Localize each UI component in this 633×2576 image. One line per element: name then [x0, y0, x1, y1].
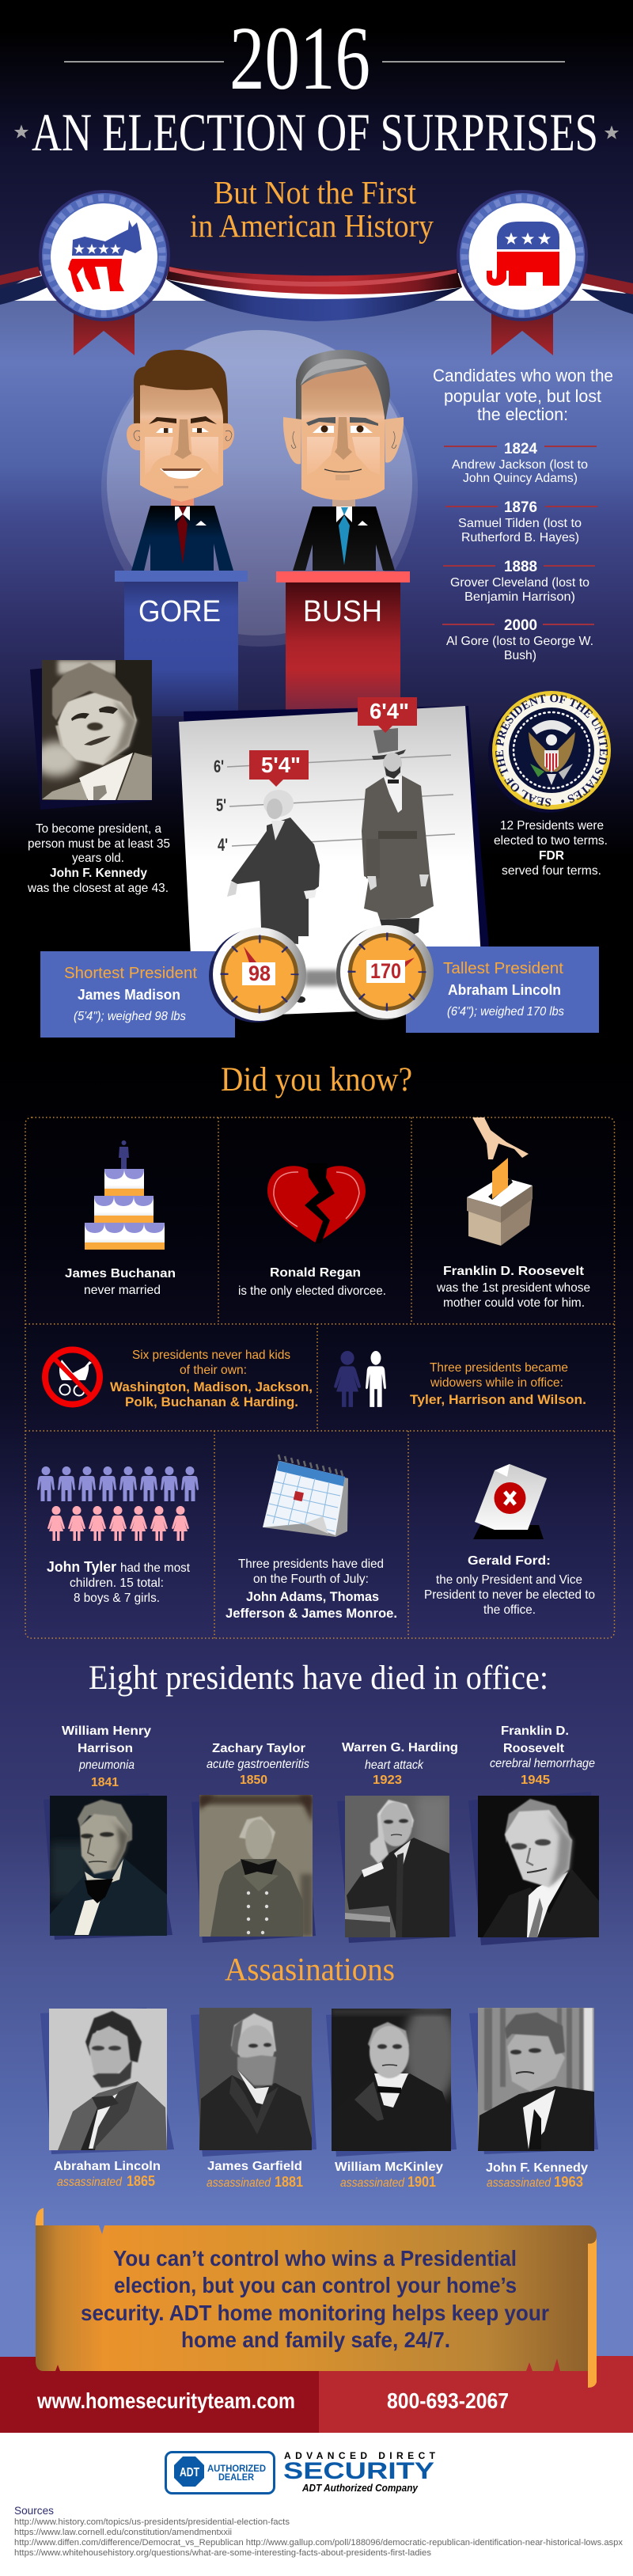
logo: Advanced Direct Security: ADT Authorized Company: [301, 2482, 419, 2494]
president: James Garfield: assassinated: [207, 2176, 271, 2190]
figure: Bush: [283, 350, 404, 571]
footer: website panel: [0, 2357, 319, 2433]
president: Warren G. Harding: 1923: [373, 1774, 402, 1787]
badge: Democratic donkey: [39, 190, 170, 355]
label: BUSH: BUSH: [303, 595, 382, 628]
president: Zachary Taylor: 1850: [240, 1774, 267, 1787]
text: Kennedy age: years old.: [72, 852, 124, 865]
president: William Henry Harrison: [44, 1724, 172, 1940]
sources: https://www.whitehousehistory.org/questions/what-are-some-interesting-facts-about-presidents-first-ladies: [14, 2548, 432, 2558]
marker: 6'4": [358, 697, 417, 733]
text: twelve presidents: served four terms.: [502, 864, 601, 878]
president: William McKinley: [326, 2001, 457, 2190]
entry 1888: Grover Cleveland (lost to: [450, 576, 589, 590]
president: James Garfield: 1881: [275, 2174, 303, 2190]
white footer area: [0, 2433, 633, 2576]
panel: shortest president: [40, 951, 235, 1038]
president: Warren G. Harding: heart attack: [365, 1758, 424, 1772]
sources: http://www.history.com/topics/us-presidents/presidential-election-facts: [14, 2517, 290, 2527]
entry 1888: [443, 559, 595, 604]
president: Abraham Lincoln: [40, 2008, 174, 2189]
fact: Fourth of July: Three presidents have died: [238, 1557, 384, 1571]
footer: phone panel: [319, 2356, 633, 2433]
president: James Garfield: James Garfield: [207, 2160, 302, 2173]
height tick 5: 5': [216, 795, 226, 815]
panel: tallest president: (6'4"); weighed 170 lbs: [447, 1005, 564, 1019]
entry 1824: John Quincy Adams): [463, 472, 578, 485]
sources heading: Sources: [14, 2504, 54, 2517]
president: William McKinley: assassinated: [340, 2176, 405, 2190]
icon: wedding cake: [85, 1140, 165, 1250]
entry 1824: 1824: [504, 441, 537, 457]
neck: [171, 495, 194, 506]
subtitle line two: in American History: [190, 207, 434, 244]
text: Kennedy age: John F. Kennedy: [50, 867, 147, 880]
marker: 6'4": 6'4": [370, 699, 409, 723]
entry 1876: [445, 499, 597, 544]
fact: Gerald Ford: the only President and Vice: [436, 1573, 582, 1587]
fact: Fourth of July: Jefferson & James Monroe.: [226, 1606, 397, 1621]
entry 2000: [442, 617, 594, 662]
fact: Gerald Ford: the office.: [483, 1603, 536, 1617]
logo: Advanced Direct Security: [283, 2450, 436, 2494]
fact: no kids: [45, 1349, 313, 1409]
fact: James Buchanan: never married: [84, 1284, 161, 1297]
fact: Franklin D. Roosevelt: mother could vote for him.: [443, 1296, 585, 1310]
entry 1824: [444, 441, 597, 485]
figure: James Madison: [227, 790, 320, 1003]
icon: broken heart: [267, 1163, 366, 1243]
president: John F. Kennedy: assassinated: [487, 2176, 552, 2190]
icon: ballot with cross: [473, 1464, 547, 1539]
fact: Ronald Regan: is the only elected divorcee.: [238, 1284, 386, 1298]
panel: tallest president: Abraham Lincoln: [448, 982, 561, 998]
footer url: www.homesecurityteam.com: [36, 2388, 295, 2413]
icon: seven girls: [47, 1506, 189, 1541]
title rule right: [382, 61, 565, 63]
logo: ADT authorized dealer: DEALER: [218, 2472, 254, 2483]
fact: no kids: Polk, Buchanan & Harding.: [125, 1394, 298, 1409]
height lines: [227, 755, 455, 846]
president: Franklin D. Roosevelt: cerebral hemorrhage: [490, 1757, 595, 1770]
sources: https://www.law.cornell.edu/constitution/amendmentxxii: [14, 2528, 232, 2537]
entry 1824: Andrew Jackson (lost to: [452, 458, 588, 472]
gauge: 98 lbs: 98: [248, 962, 271, 985]
text: Kennedy age: To become president, a: [36, 822, 161, 836]
scale shadow: [305, 970, 339, 986]
entry 1876: Samuel Tilden (lost to: [458, 517, 582, 530]
president: John F. Kennedy: John F. Kennedy: [486, 2161, 588, 2175]
fact: widowers: Tyler, Harrison and Wilson.: [410, 1392, 586, 1407]
sources: [14, 2504, 623, 2558]
fact: Fourth of July: [226, 1455, 397, 1621]
president: Franklin D. Roosevelt: 1945: [521, 1774, 550, 1787]
text: twelve presidents: [494, 819, 608, 878]
gauge: 98 lbs: [209, 928, 306, 1022]
president: William McKinley: 1901: [407, 2174, 436, 2190]
star right: [605, 126, 619, 139]
ribbon tail: [491, 313, 553, 355]
entry 2000: Bush): [504, 649, 536, 662]
panel: tallest president: Tallest President: [443, 960, 563, 977]
fact: Fourth of July: on the Fourth of July:: [253, 1573, 369, 1586]
scroll callout: You can’t control who wins a Presidential: [113, 2246, 517, 2271]
icon: woman and man: [334, 1351, 386, 1407]
fact: Ronald Regan: [238, 1163, 386, 1298]
seal eagle: [529, 720, 575, 785]
text: candidates who won the popular vote: the election:: [477, 404, 568, 424]
fact: no kids: Washington, Madison, Jackson,: [110, 1379, 313, 1394]
president: Zachary Taylor: [191, 1742, 316, 1943]
fact: Gerald Ford: [424, 1464, 595, 1617]
text: candidates who won the popular vote: popular vote, but lost: [444, 386, 601, 406]
president: Zachary Taylor: Zachary Taylor: [212, 1742, 305, 1755]
footer band: [0, 2356, 633, 2433]
background: dark header field: [0, 0, 633, 297]
entry 1888: Benjamin Harrison): [464, 590, 575, 604]
title: 2016: 2016: [229, 8, 370, 108]
fact: no kids: Six presidents never had kids: [132, 1349, 290, 1362]
star left: [14, 125, 28, 138]
icon: calendar: [263, 1455, 348, 1537]
icon: no stroller: [45, 1350, 100, 1404]
fact: John Tyler: children. 15 total:: [70, 1576, 164, 1590]
seal lettering: SEAL OF THE PRESIDENT OF THE UNITED STATES •: [495, 694, 608, 806]
halo behind candidates: [101, 330, 418, 647]
president: William Henry Harrison: 1841: [91, 1776, 119, 1789]
fact: Gerald Ford: Gerald Ford:: [468, 1554, 551, 1568]
gauge: 170 lbs: 170: [370, 959, 401, 983]
president: John F. Kennedy: 1963: [554, 2174, 583, 2190]
fact: John Tyler: had the most: [120, 1561, 191, 1575]
president: Abraham Lincoln: assassinated: [57, 2176, 123, 2189]
facts grid lines: [25, 1117, 614, 1638]
heading: Did you know: Did you know?: [221, 1061, 412, 1098]
president: Warren G. Harding: [337, 1741, 458, 1943]
president: Abraham Lincoln: Abraham Lincoln: [54, 2160, 161, 2173]
logo: Advanced Direct Security: ADVANCED DIRECT: [284, 2450, 436, 2461]
text: Kennedy age: person must be at least 35: [28, 837, 170, 851]
icon: donkey: [68, 220, 142, 292]
fact: no kids: of their own:: [180, 1364, 247, 1377]
subtitle line one: But Not the First: [214, 174, 417, 211]
panel: shortest president: James Madison: [78, 987, 180, 1003]
fact: widowers: widowers while in office:: [430, 1376, 563, 1390]
president: William Henry Harrison: pneumonia: [78, 1758, 135, 1772]
panel: shortest president: (5'4"); weighed 98 lbs: [74, 1010, 186, 1023]
entry 2000: 2000: [504, 617, 537, 634]
sources: http://www.diffen.com/difference/Democrat_vs_Republican http://www.gallup.com/poll/188096/democratic-republican-identification-near-historical-lows.aspx: [14, 2538, 623, 2548]
text: twelve presidents: 12 Presidents were: [500, 819, 604, 833]
president: John F. Kennedy: [469, 2008, 598, 2190]
president: William Henry Harrison: Harrison: [78, 1742, 133, 1755]
podium: Bush: [276, 571, 410, 717]
president: Abraham Lincoln: 1865: [127, 2173, 155, 2189]
heading: Assasinations: Assasinations: [225, 1951, 395, 1987]
fact: Franklin D. Roosevelt: was the 1st president whose: [436, 1281, 590, 1295]
president: Warren G. Harding: Warren G. Harding: [342, 1741, 458, 1755]
fact: Franklin D. Roosevelt: Franklin D. Roosevelt: [443, 1265, 585, 1278]
president: Franklin D. Roosevelt: Franklin D.: [501, 1724, 569, 1738]
text: twelve presidents: FDR: [539, 849, 564, 863]
photo: young Kennedy: [30, 660, 152, 810]
text: Kennedy age: was the closest at age 43.: [27, 882, 169, 895]
footer phone: 800-693-2067: [387, 2388, 509, 2413]
marker: 5'4": [249, 750, 309, 787]
height chart: [179, 697, 491, 1018]
entry 1876: 1876: [504, 499, 537, 516]
height tick 4: 4': [218, 835, 228, 855]
fact: widowers: Three presidents became: [430, 1361, 568, 1375]
icon: ballot box: [467, 1117, 533, 1246]
president: James Garfield: [191, 2008, 316, 2190]
fact: Ronald Regan: Ronald Regan: [270, 1266, 361, 1280]
marker: 5'4": 5'4": [261, 753, 301, 777]
entry 2000: Al Gore (lost to George W.: [446, 635, 593, 648]
gauge: 170 lbs: [336, 925, 434, 1020]
scroll callout: security. ADT home monitoring helps keep your: [81, 2301, 549, 2325]
fact: Gerald Ford: President to never be elected to: [424, 1588, 595, 1602]
fact: John Tyler: John Tyler: [47, 1559, 116, 1575]
text: twelve presidents: elected to two terms.: [494, 834, 608, 848]
panel: tallest president: [406, 947, 599, 1033]
fact: John Tyler: [37, 1466, 199, 1605]
height tick 6: 6': [214, 757, 224, 776]
fact: James Buchanan: James Buchanan: [65, 1267, 176, 1280]
fact: Fourth of July: John Adams, Thomas: [246, 1589, 379, 1604]
icon: eight boys: [37, 1466, 199, 1501]
title rule left: [64, 61, 224, 63]
figure: Abraham Lincoln: [362, 728, 434, 935]
logo: ADT authorized dealer: AUTHORIZED: [207, 2463, 266, 2474]
president: Franklin D. Roosevelt: Roosevelt: [503, 1742, 565, 1755]
podium: Gore: [115, 571, 248, 716]
entry 1888: 1888: [504, 559, 537, 575]
fact: Franklin D. Roosevelt: [436, 1117, 590, 1310]
president: Zachary Taylor: acute gastroenteritis: [207, 1758, 309, 1771]
intro heading: Candidates who won the: [433, 366, 613, 385]
fact: widowers: [334, 1351, 586, 1407]
logo: Advanced Direct Security: SECURITY: [283, 2458, 434, 2484]
president: William Henry Harrison: William Henry: [62, 1724, 151, 1738]
label: GORE: GORE: [138, 595, 221, 628]
icon: elephant: [487, 222, 559, 286]
candidate: Gore: [115, 350, 248, 716]
ribbon tail: [74, 313, 135, 355]
fact: James Buchanan: [65, 1140, 176, 1297]
candidate: Bush: [276, 350, 410, 717]
heading: eight presidents: Eight presidents have died in office:: [89, 1660, 548, 1697]
president: Franklin D. Roosevelt: [468, 1724, 599, 1945]
badge: Republican elephant: [457, 190, 588, 355]
scroll callout: election, but you can control your home’s: [114, 2273, 517, 2297]
text: Kennedy age: [27, 822, 170, 895]
scroll callout: home and family safe, 24/7.: [181, 2328, 450, 2352]
ribbon swag: [0, 267, 633, 321]
photo: presidential seal: [488, 691, 611, 813]
panel: shortest president: Shortest President: [64, 965, 197, 982]
entry 1876: Rutherford B. Hayes): [461, 531, 579, 544]
figure: Gore: [127, 350, 234, 571]
logo: ADT authorized dealer: ADT: [180, 2466, 199, 2479]
logo: ADT authorized dealer: [166, 2452, 274, 2493]
title block: [14, 8, 619, 244]
scroll callout: [36, 2208, 597, 2388]
fact: John Tyler: 8 boys & 7 girls.: [74, 1592, 160, 1605]
president: William McKinley: William McKinley: [335, 2161, 443, 2174]
text: candidates who won the popular vote: [433, 366, 613, 662]
